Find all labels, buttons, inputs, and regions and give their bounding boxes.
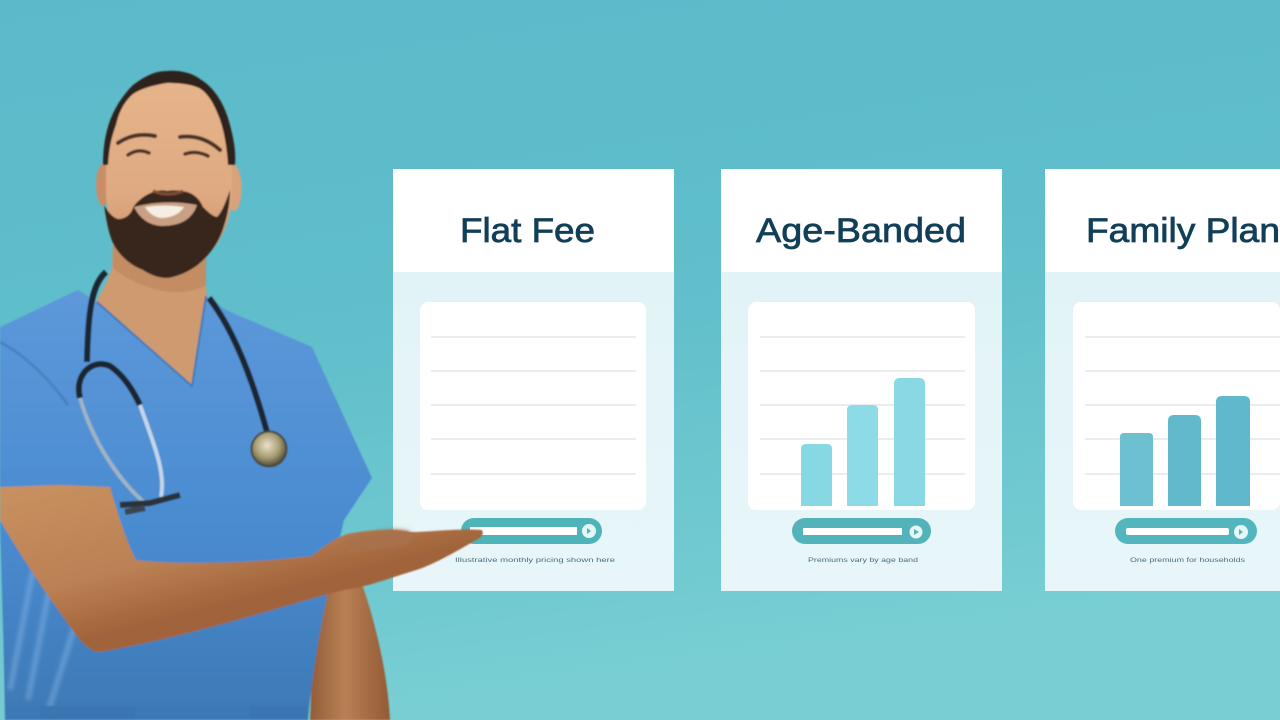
face xyxy=(106,78,232,272)
eyes xyxy=(128,151,208,156)
chest piece xyxy=(252,432,286,466)
stethoscope xyxy=(79,272,267,512)
bar chart: rising teal bars xyxy=(1073,302,1280,510)
heading: Family Plan: Family Plan xyxy=(1086,212,1280,250)
hair xyxy=(103,71,235,165)
panel: Age-Banded xyxy=(721,169,1002,591)
thumb xyxy=(345,530,412,552)
empty chart card xyxy=(420,302,646,510)
bar chart: rising light bars xyxy=(748,302,975,510)
mouth xyxy=(134,202,197,226)
scrubs xyxy=(0,290,372,720)
figure: smiling nurse in blue scrubs with stethoscope xyxy=(0,71,483,720)
panel: Flat Fee xyxy=(393,169,674,591)
heading: Flat Fee: Flat Fee xyxy=(460,212,595,250)
ear right xyxy=(226,165,242,211)
far arm xyxy=(308,584,390,720)
panel: Family Plan xyxy=(1045,169,1280,591)
button xyxy=(461,518,602,544)
brows xyxy=(118,135,220,150)
near arm and hand xyxy=(0,485,483,652)
button xyxy=(792,518,931,544)
caption: One premium for households xyxy=(1130,558,1245,564)
neck shadow xyxy=(113,240,207,292)
ear left xyxy=(96,164,110,206)
beard xyxy=(104,190,230,278)
caption: Illustrative monthly pricing shown here xyxy=(455,558,616,564)
caption: Premiums vary by age band xyxy=(808,558,918,564)
neck xyxy=(96,235,208,386)
button xyxy=(1115,518,1257,544)
nose xyxy=(153,191,183,194)
heading: Age-Banded: Age-Banded xyxy=(756,212,966,250)
